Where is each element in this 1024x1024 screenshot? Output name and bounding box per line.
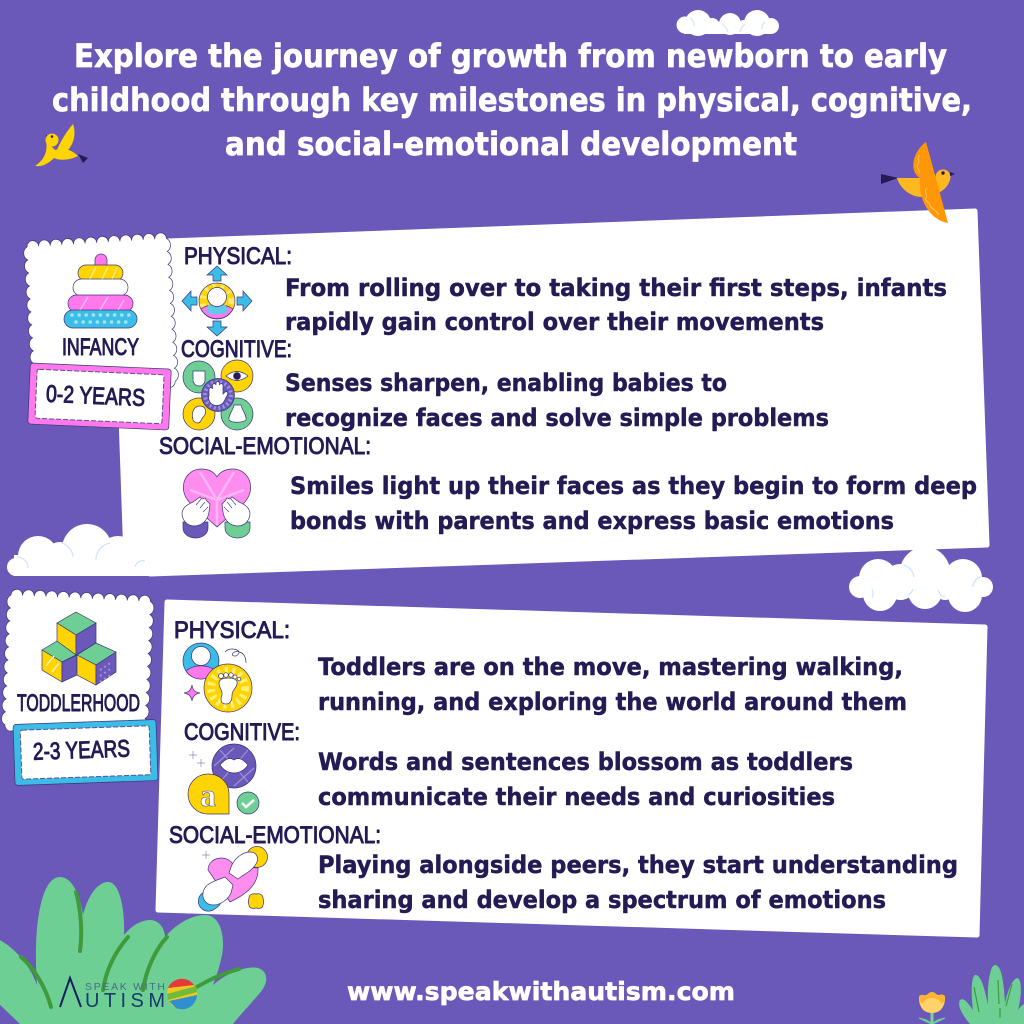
- text: cognitive: communicate their needs and curiosities: [318, 783, 835, 811]
- text: social-emotional: Smiles light up their faces as they begin to form deep: [290, 472, 977, 500]
- text: social-emotional: bonds with parents and express basic emotions: [290, 507, 894, 535]
- website url: www.speakwithautism.com: [347, 977, 735, 1006]
- text: physical: Toddlers are on the move, mastering walking,: [318, 653, 903, 681]
- text: cognitive: [318, 748, 853, 811]
- text: cognitive: Words and sentences blossom as toddlers: [318, 748, 853, 776]
- panel background: [115, 211, 987, 574]
- icon: heart in hands: [182, 469, 251, 538]
- icon: sharing heart and hands: [194, 846, 268, 915]
- text: cognitive: recognize faces and solve simple problems: [285, 404, 829, 432]
- label card: infancy: [23, 232, 179, 396]
- badge: 0-2 years: 0-2 YEARS: [45, 381, 146, 412]
- text: physical: rapidly gain control over their movements: [285, 308, 824, 336]
- plant: flower: [919, 992, 945, 1024]
- logo: speak with autism: [60, 978, 197, 1012]
- label: toddlerhood: TODDLERHOOD: [17, 690, 140, 717]
- label card: toddlerhood: [1, 589, 154, 738]
- heading: cognitive: COGNITIVE:: [181, 336, 292, 363]
- scalloped card: [23, 232, 179, 396]
- text: social-emotional: sharing and develop a spectrum of emotions: [318, 886, 886, 914]
- cloud: bottom left: [7, 524, 150, 576]
- text: cognitive: Senses sharpen, enabling babies to: [285, 369, 727, 397]
- panel background: [158, 602, 985, 935]
- text: physical: running, and exploring the world around them: [318, 688, 907, 716]
- bird: orange: [881, 142, 955, 223]
- scalloped card: [1, 589, 154, 738]
- icon: speech: a: [200, 777, 216, 813]
- text: social-emotional: [290, 472, 977, 535]
- plant: large bush: [0, 877, 266, 1024]
- heading: social-emotional: SOCIAL-EMOTIONAL:: [169, 822, 381, 849]
- icon: speech: [188, 744, 259, 814]
- cloud: right: [849, 547, 993, 612]
- logo: speak with autism: UTISM: [85, 990, 165, 1012]
- plant: small bush: [959, 965, 1024, 1024]
- title: [52, 37, 972, 163]
- text: cognitive: [285, 369, 829, 432]
- heading: cognitive: COGNITIVE:: [184, 719, 300, 746]
- title: Explore the journey of growth from newborn to early: [74, 37, 947, 75]
- heading: physical: PHYSICAL:: [174, 617, 290, 644]
- icon: stacking rings: [64, 254, 137, 328]
- logo: speak with autism: SPEAK WITH: [85, 981, 165, 993]
- icon: baby with arrows: [182, 266, 252, 336]
- text: physical: [285, 274, 947, 336]
- rainbow badge: [167, 979, 197, 1009]
- text: social-emotional: Playing alongside peers, they start understanding: [318, 851, 958, 879]
- icon: baby and footprint: [183, 643, 252, 712]
- text: physical: [318, 653, 907, 716]
- panel: infancy: [7, 142, 987, 576]
- icon: building blocks: [42, 612, 116, 685]
- panel: toddlerhood: [1, 547, 993, 935]
- badge: 0-2 years: [28, 363, 171, 430]
- title: and social-emotional development: [225, 125, 797, 163]
- label: infancy: INFANCY: [62, 334, 139, 361]
- heading: physical: PHYSICAL:: [184, 243, 292, 270]
- badge: 2-3 years: [13, 720, 158, 785]
- heading: social-emotional: SOCIAL-EMOTIONAL:: [159, 433, 371, 460]
- cloud: top: [676, 10, 779, 36]
- icon: five senses: [183, 360, 253, 430]
- badge: 2-3 years: 2-3 YEARS: [33, 735, 130, 766]
- text: social-emotional: [318, 851, 958, 914]
- text: physical: From rolling over to taking their first steps, infants: [285, 274, 947, 302]
- icon: yellow bird: [35, 124, 88, 166]
